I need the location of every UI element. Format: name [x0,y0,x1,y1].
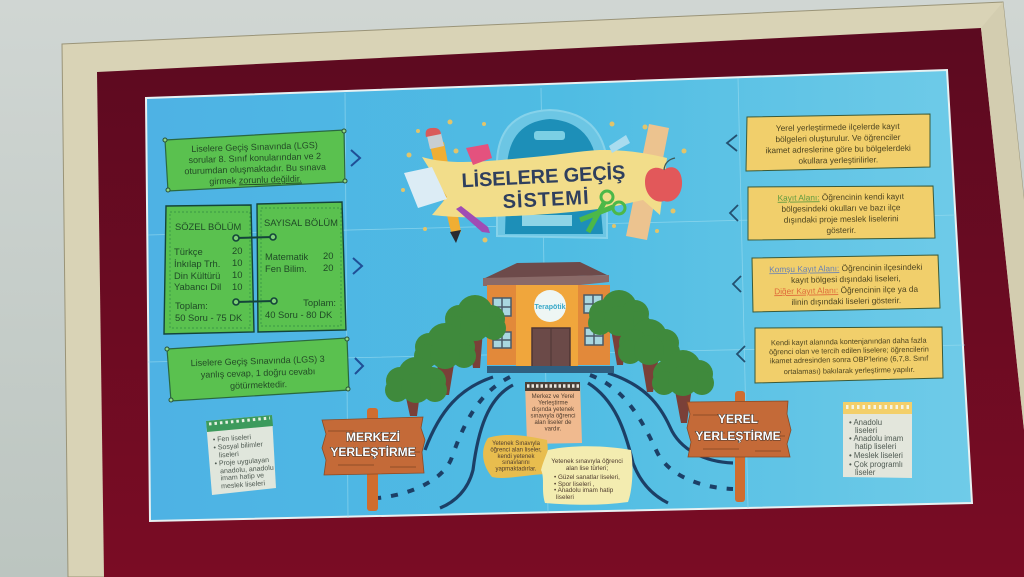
green info box 3: Liselere Geçiş Sınavında (LGS) 3 [191,354,325,368]
poster background [146,70,972,521]
blob: yetenek sınavı note: sınavlarını [502,460,530,466]
confetti dots [401,120,686,242]
blob: yetenek lise türleri: alan lise türleri; [566,465,608,472]
icon: paper sheet [404,167,447,208]
blob: yetenek sınavı note: Yetenek Sınavıyla [492,441,541,447]
panel: sayısal bölüm: SAYISAL BÖLÜM [264,217,338,228]
note: merkez ve yerel dışında: Yerleştirme [538,400,569,406]
panel: sayısal bölüm: Toplam: [303,297,336,308]
note: merkezi school list: meslek liseleri [221,480,266,490]
yellow info box 2: bölgesindeki okulları ve bazı ilçe [781,202,901,214]
yellow info box 3: Diğer Kayıt Alanı: Öğrencinin ilçe ya da [774,284,919,296]
blob: yetenek lise türleri [541,446,632,505]
icon: scissors [580,191,625,232]
note: merkez ve yerel dışında [525,382,582,444]
blob: yetenek lise türleri: • Spor liseleri , [554,481,595,488]
note: merkez ve yerel dışında: vardır. [545,426,562,432]
panel: sayısal bölüm [257,202,346,332]
yellow info box 1: okullara yerleştirilirler. [798,154,878,166]
note: merkezi school list: • Fen liseleri [213,434,252,444]
note: yerel school list: • Anadolu [849,418,882,427]
green info box 1 [163,129,347,192]
panel: sözel bölüm: İnkılap Trh. [174,258,220,269]
green info box 1: sorular 8. Sınıf konularından ve 2 [188,151,321,165]
title text: SİSTEMİ [502,186,589,213]
blob: yetenek sınavı note: yapmaktadırlar. [495,466,537,472]
trees right [588,290,714,423]
green info box 1: oturumdan oluşmaktadır. Bu sınava [184,162,326,176]
yellow info box 3: Komşu Kayıt Alanı: Öğrencinin ilçesindeki [769,262,923,274]
panel: sözel bölüm: 10 [232,281,242,292]
yellow info box 1 [746,114,930,171]
green info box 1: Liselere Geçiş Sınavında (LGS) [191,140,318,154]
yellow info box 3: ilinin dışındaki liseleri gösterir. [791,295,901,307]
yellow info box 4 [755,327,943,383]
title illustration [401,110,686,243]
yellow info box 2: Kayıt Alanı: Öğrencinin kendi kayıt [778,191,905,203]
yellow info box 1: bölgeleri oluşturulur. Ve öğrenciler [775,132,901,144]
yellow info box 3 [752,255,940,312]
panel: sayısal bölüm: Fen Bilim. [265,263,307,274]
note: yerel school list: liseler [855,468,876,477]
signpost: yerel yerleştirme [687,391,791,502]
note: yerel school list: hatip liseleri [855,442,896,451]
blob: yetenek lise türleri: Yetenek sınavıyla öğrenci [551,458,623,465]
signpost: merkezi yerleştirme: MERKEZİ [346,429,400,444]
title text: LİSELERE GEÇİŞ [461,161,626,192]
windows [493,295,603,348]
icon: crayon [456,206,490,233]
blob: yetenek sınavı note: öğrenci alan liseler, [490,448,542,454]
note: merkezi school list: anadolu, anadolu [220,465,274,475]
yellow info box 4: Kendi kayıt alanında kontenjanından daha fazla [771,336,928,347]
note: yerel school list: • Meslek liseleri [849,451,903,460]
panel: sözel bölüm: Türkçe [174,246,203,257]
blob: yetenek lise türleri: • Anadolu imam hatip [554,487,614,494]
frame right edge [981,2,1024,430]
green info box 3: götürmektedir. [230,379,287,391]
icon: ruler [626,124,669,240]
yellow info box 2: dışındaki proje meslek liselerini [784,213,899,225]
green info box 3 [165,337,350,402]
yellow info box 4: ikamet adresinden sonra OBP'lerine (6,7,8. Sınıf [770,354,929,365]
blob: yetenek lise türleri: liseleri [556,494,574,501]
logo badge: Terapötik [534,304,566,311]
signpost: merkezi yerleştirme: YERLEŞTİRME [330,444,416,459]
yellow info box 3: kayıt bölgesi dışındaki liseleri, [791,273,901,285]
door [532,328,570,367]
trees left [385,295,506,416]
note: merkezi school list: • Proje uygulayan [214,457,269,468]
panel: sayısal bölüm: Matematik [265,251,309,262]
panel: sözel bölüm: Din Kültürü [174,270,220,281]
icon: apple [645,158,682,202]
signpost: merkezi yerleştirme [322,408,425,511]
panel: sözel bölüm: 10 [232,269,242,280]
binder clips [233,234,277,305]
title text [461,161,627,215]
panel: sayısal bölüm: 40 Soru - 80 DK [265,309,333,320]
blob: yetenek lise türleri: • Güzel sanatlar liseleri, [554,474,620,481]
panel: sözel bölüm: 10 [232,257,242,268]
panel: sayısal bölüm: 20 [323,250,333,261]
note: merkezi school list [206,415,276,495]
yellow info box 1: Yerel yerleştirmede ilçelerde kayıt [776,121,900,133]
panel: sayısal bölüm: 20 [323,262,333,273]
icon: pencil [426,128,461,243]
note: yerel school list: • Çok programlı [849,460,903,469]
roads [378,373,733,508]
panel: sözel bölüm [164,205,254,334]
panel: sözel bölüm: 50 Soru - 75 DK [175,312,243,323]
yellow info box 2 [748,186,935,240]
signpost: yerel yerleştirme: YEREL [718,412,758,426]
yellow info box 1: ikamet adreslerine göre bu bölgelerdeki [765,143,911,155]
arrows: right column chevrons [727,135,745,362]
signpost: yerel yerleştirme: YERLEŞTİRME [695,428,781,443]
icon: eraser [609,135,630,153]
blob: yetenek sınavı note [483,435,548,478]
yellow info box 2: gösterir. [826,225,856,235]
panel: sözel bölüm: Yabancı Dil [174,281,221,292]
yellow info box 4: öğrenci olan ve tercih edilen liselere; öğrencilerin [769,345,929,356]
note: merkezi school list: imam hatip ve [220,472,264,482]
panel: sözel bölüm: SÖZEL BÖLÜM [175,221,242,232]
panel: sözel bölüm: 20 [232,245,242,256]
school building [483,262,614,373]
note: merkez ve yerel dışında: alan liseler de [534,420,572,426]
note: yerel school list [843,402,912,478]
note: yerel school list: • Anadolu imam [849,434,903,443]
note: merkez ve yerel dışında: sınavıyla öğrenci [530,414,576,420]
arrows: left column chevrons [351,150,363,374]
note: merkez ve yerel dışında: dışında yetenek [532,407,575,413]
green info box 1: girmek zorunlu değildir. [209,174,302,186]
yellow info box 4: ortalaması) bakılarak yerleştirme yapılır. [784,365,915,376]
blob: yetenek sınavı note: kendi yetenek [497,454,536,460]
note: merkezi school list: • Sosyal bilimler [213,441,264,452]
note: merkez ve yerel dışında: Merkez ve Yerel [532,394,574,400]
green info box 3: yanlış cevap, 1 doğru cevabı [201,366,316,380]
panel: sözel bölüm: Toplam: [175,300,208,311]
note: merkezi school list: liseleri [219,451,239,459]
banner [422,150,667,217]
note: yerel school list: liseleri [855,426,877,435]
backpack [497,110,607,238]
icon: sharpener [466,144,492,165]
